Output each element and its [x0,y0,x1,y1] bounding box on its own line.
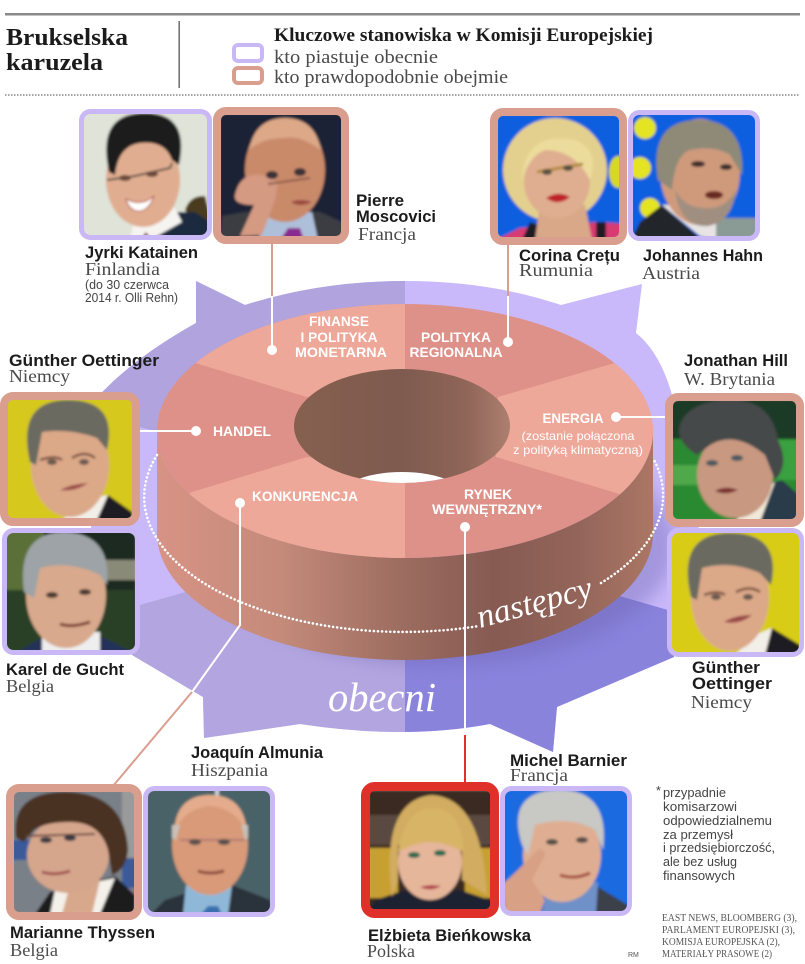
name label: Günther Oettinger, right [691,659,773,712]
name label: Karel de Gucht: Karel de Gucht [6,661,124,679]
portrait: Marianne Thyssen [10,788,138,916]
name label: Michel Barnier [510,752,628,785]
name label: Corina Cretu: Rumunia [519,260,593,280]
name label: Jyrki Katainen: Jyrki Katainen [85,244,198,262]
name label: Jyrki Katainen: 2014 r. Olli Rehn) [85,291,178,305]
segment labels: RYNEK [464,486,512,502]
label: successors: następcy [473,570,596,636]
segment labels: REGIONALNA [410,344,502,360]
name label: Michel Barnier: Michel Barnier [510,752,628,770]
name label: Joaquín Almunia [191,744,324,780]
title: Brukselska [6,25,128,51]
segment labels: FINANSE [309,313,369,329]
name label: Jyrki Katainen: (do 30 czerwca [85,278,169,292]
photo credits: KOMISJA EUROPEJSKA (2), [662,937,780,948]
portrait: Jonathan Hill [669,397,800,523]
footnote: ale bez usług [663,855,737,869]
name label: Jonathan Hill [684,352,788,389]
name label: Corina Cretu: Corina Crețu [519,247,620,265]
label: current: obecni [328,674,436,720]
donut top segments [157,304,653,558]
legend [234,25,653,88]
portrait: Günther Oettinger, left [3,396,136,522]
segment labels: ENERGIA [542,410,604,426]
name label: Günther Oettinger, left [9,352,160,386]
name label: Corina Cretu [519,247,620,280]
portrait: Karel de Gucht [4,530,138,655]
name label: Marianne Thyssen: Marianne Thyssen [10,924,155,942]
name label: Elżbieta Bieńkowska: Polska [367,941,415,961]
name label: Joaquín Almunia: Joaquín Almunia [191,744,324,762]
title [6,25,128,76]
portrait: Johannes Hahn [629,112,758,240]
donut hole [294,369,510,483]
portrait: Corina Cretu [494,112,627,241]
footnote: odpowiedzialnemu [663,814,772,828]
gear: current commissioners ring [80,270,720,760]
segment labels: (zostanie połączona [522,429,635,443]
name label: Elżbieta Bieńkowska: Elżbieta Bieńkowska [368,927,532,945]
segment labels: MONETARNA [295,344,387,360]
portrait: Günther Oettinger, right [669,530,802,655]
name label: Jonathan Hill: Jonathan Hill [684,352,788,370]
footnote [656,784,775,883]
portrait: Elżbieta Bieńkowska [366,786,494,914]
legend: kto piastuje obecnie [274,47,438,68]
segment labels: I POLITYKA [300,329,378,345]
photo credits [628,913,797,960]
portrait: Jyrki Katainen [82,112,210,240]
photo credits: PARLAMENT EUROPEJSKI (3), [662,925,795,936]
name label: Jyrki Katainen [85,244,198,305]
footnote: * [656,784,661,798]
name label: Pierre Moscovici [356,192,436,244]
legend: Kluczowe stanowiska w Komisji Europejskiej [274,25,653,46]
name label: Pierre Moscovici: Francja [358,224,416,244]
segment labels: HANDEL [213,423,271,439]
footnote: komisarzowi [663,800,737,814]
connector lines [113,244,668,786]
footnote: za przemysł [663,828,733,842]
carousel diagram [80,244,720,786]
name label: Johannes Hahn: Johannes Hahn [643,247,763,265]
name label: Pierre Moscovici: Pierre [356,192,404,210]
footnote: przypadnie [663,786,726,800]
footnote: finansowych [663,869,735,883]
name label: Karel de Gucht: Belgia [6,676,54,696]
photo credits: EAST NEWS, BLOOMBERG (3), [662,913,797,924]
name label: Joaquín Almunia: Hiszpania [191,760,268,780]
segment labels: z polityką klimatyczną) [513,443,643,457]
portrait: Pierre Moscovici [217,111,345,240]
donut side wall [157,431,653,660]
name label: Günther Oettinger, left: Niemcy [9,366,70,386]
name label: Günther Oettinger, right: Niemcy [691,692,752,712]
name label: Johannes Hahn [642,247,763,283]
name label: Marianne Thyssen [10,924,155,960]
photo credits: MATERIAŁY PRASOWE (2) [662,949,772,960]
segment labels: WEWNĘTRZNY* [432,501,543,517]
photo credits: RM [628,952,639,959]
name label: Günther Oettinger, left: Günther Oettinger [9,352,160,370]
legend: kto prawdopodobnie obejmie [274,67,508,88]
name label: Johannes Hahn: Austria [642,263,700,283]
name label: Marianne Thyssen: Belgia [10,940,58,960]
page header [5,13,800,95]
name label: Michel Barnier: Francja [510,765,568,785]
name label: Jonathan Hill: W. Brytania [684,369,775,389]
portrait: Michel Barnier [502,788,630,914]
title: karuzela [6,50,103,76]
segment labels [213,313,643,517]
segment labels: KONKURENCJA [252,488,358,504]
footnote: i przedsiębiorczość, [663,841,775,855]
segment labels: POLITYKA [421,329,491,345]
portrait: Joaquín Almunia [146,788,273,915]
name label: Karel de Gucht [6,661,124,696]
name label: Günther Oettinger, right: Oettinger [692,675,773,693]
name label: Jyrki Katainen: Finlandia [85,259,160,279]
name label: Elżbieta Bieńkowska [367,927,532,961]
dotted ring: successors [144,455,663,632]
name label: Günther Oettinger, right: Günther [692,659,761,677]
name label: Pierre Moscovici: Moscovici [356,208,436,226]
